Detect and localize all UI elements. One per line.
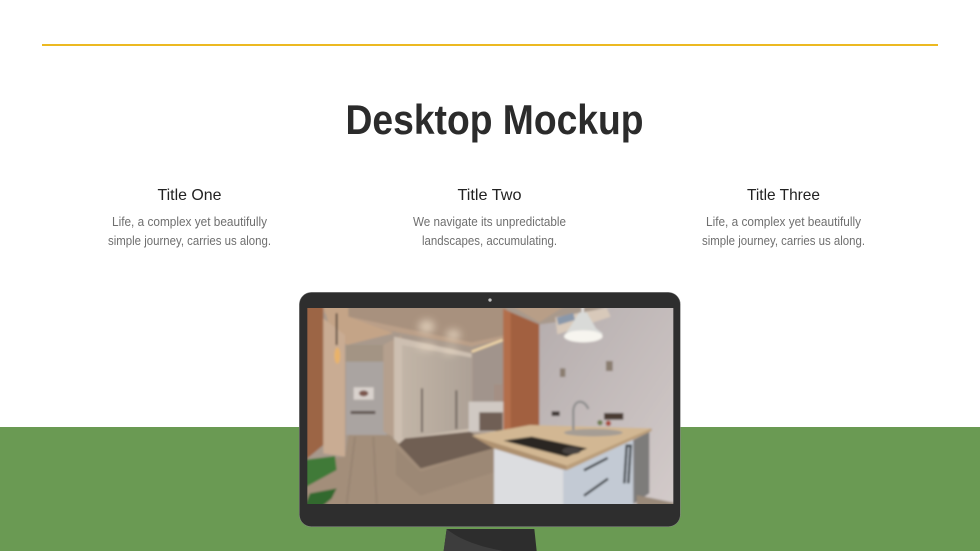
body text: title two: We navigate its unpredictable	[413, 214, 566, 229]
left partition	[323, 318, 345, 457]
webcam	[488, 298, 492, 302]
faucet	[573, 402, 588, 430]
corridor picture	[354, 387, 374, 400]
body text: title two	[413, 214, 566, 248]
socket and items	[604, 413, 623, 420]
ceiling beam near AC	[516, 308, 562, 322]
hanging lamp left	[334, 313, 339, 345]
screen photo: studio apartment	[303, 305, 677, 508]
brick column	[509, 312, 540, 430]
pendant lamp	[566, 312, 602, 334]
ceiling	[357, 319, 503, 346]
heading: title two: Title Two	[458, 187, 522, 204]
counter cabinet	[494, 448, 563, 508]
dresser	[469, 402, 503, 432]
body text: title one: Life, a complex yet beautifully	[112, 214, 267, 229]
title: Desktop Mockup	[346, 96, 644, 143]
corridor	[346, 362, 386, 436]
pendant lamp cord	[580, 308, 586, 314]
corridor shelf	[351, 411, 375, 414]
top accent line	[42, 44, 938, 46]
wall sconces	[560, 368, 565, 377]
background band: green floor	[0, 427, 980, 551]
body text: title one	[108, 214, 271, 248]
sink	[564, 429, 623, 436]
column: title three	[702, 187, 865, 248]
body text: title one: simple journey, carries us along.	[108, 233, 271, 248]
plant	[303, 456, 337, 488]
left brick wall	[307, 308, 324, 460]
wardrobe	[394, 337, 472, 445]
column: title one	[108, 187, 271, 248]
desktop monitor mockup	[299, 292, 680, 551]
body text: title three: simple journey, carries us along.	[702, 233, 865, 248]
counter top	[472, 425, 652, 468]
floor	[308, 435, 494, 504]
monitor stand	[444, 529, 537, 551]
air conditioner	[555, 308, 611, 334]
handles	[584, 446, 631, 496]
body text: title three: Life, a complex yet beautifully	[706, 214, 861, 229]
hob	[503, 437, 587, 457]
body text: title three	[702, 214, 865, 248]
corridor doorframe	[383, 340, 394, 436]
body text: title two: landscapes, accumulating.	[422, 233, 557, 248]
heading: title three: Title Three	[747, 187, 820, 204]
bed base	[396, 448, 493, 496]
bed cover	[398, 432, 493, 468]
monitor bezel	[299, 292, 680, 527]
column: title two	[413, 187, 566, 248]
heading: title one: Title One	[158, 187, 222, 204]
ceiling glows	[417, 320, 461, 354]
base wall	[307, 308, 606, 463]
kitchen wall	[539, 305, 677, 508]
niche	[473, 340, 503, 402]
